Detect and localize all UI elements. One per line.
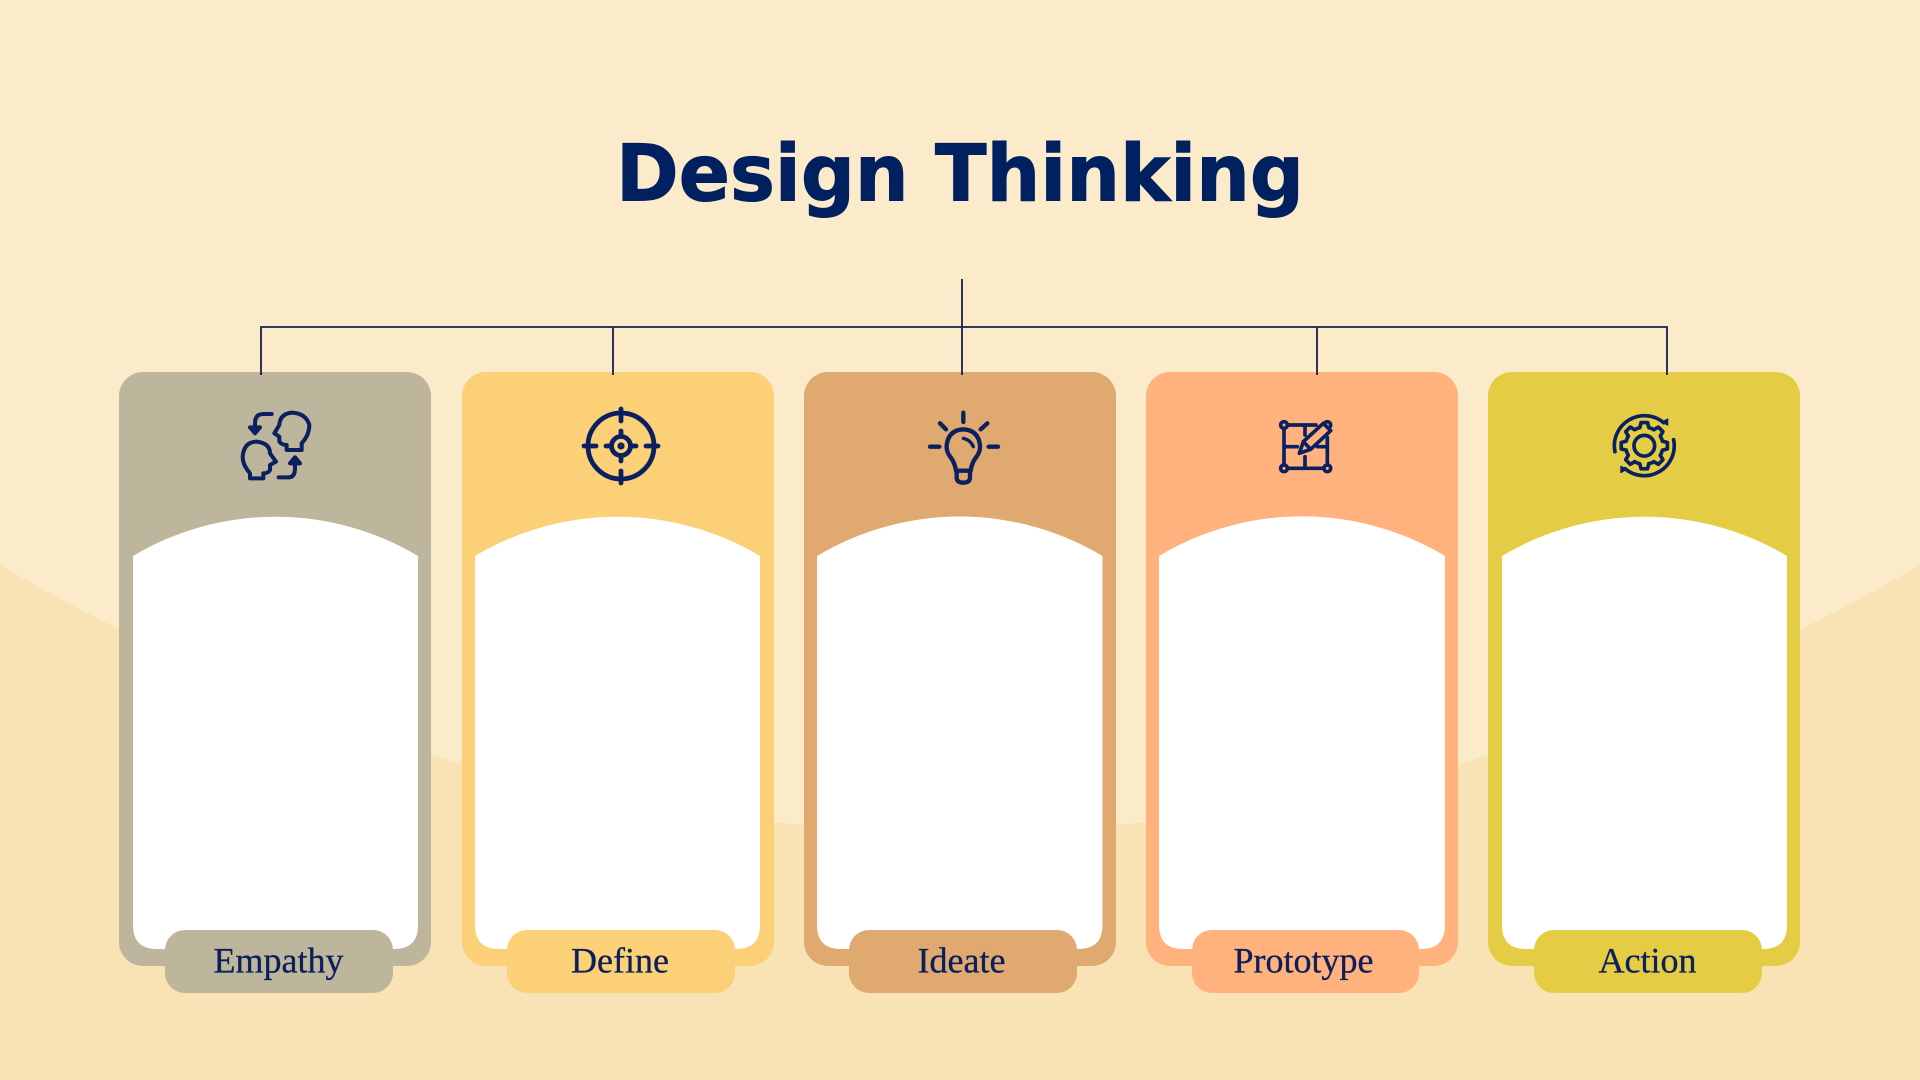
icon: drawing frame and pencil	[1281, 422, 1331, 472]
label pill	[1192, 930, 1419, 993]
icon: light bulb	[930, 413, 998, 483]
card: Empathy	[119, 372, 431, 993]
icon: gear with rotating arrows	[1614, 416, 1674, 476]
label: Prototype	[1234, 940, 1374, 980]
white content area	[817, 517, 1102, 949]
title: Design Thinking	[616, 130, 1304, 220]
label: Define	[571, 940, 669, 980]
card body	[462, 372, 774, 966]
icon: target	[584, 409, 658, 483]
card body	[1146, 372, 1458, 966]
label pill	[165, 930, 393, 993]
card: Prototype	[1146, 372, 1458, 993]
label: Action	[1599, 940, 1696, 980]
white content area	[133, 517, 418, 949]
label pill	[849, 930, 1077, 993]
white content area	[1159, 516, 1445, 949]
label: Empathy	[214, 940, 343, 980]
card: Action	[1488, 372, 1800, 993]
connector lines	[261, 279, 1667, 375]
card: Ideate	[804, 372, 1116, 993]
card body	[119, 372, 431, 966]
card: Define	[462, 372, 774, 993]
white content area	[1502, 517, 1787, 949]
label pill	[507, 930, 735, 993]
icon: heads exchanging	[243, 413, 309, 478]
label: Ideate	[918, 940, 1005, 980]
card body	[804, 372, 1116, 966]
white content area	[475, 517, 760, 949]
label pill	[1534, 930, 1762, 993]
card body	[1488, 372, 1800, 966]
background lower curved band	[0, 565, 1920, 1080]
